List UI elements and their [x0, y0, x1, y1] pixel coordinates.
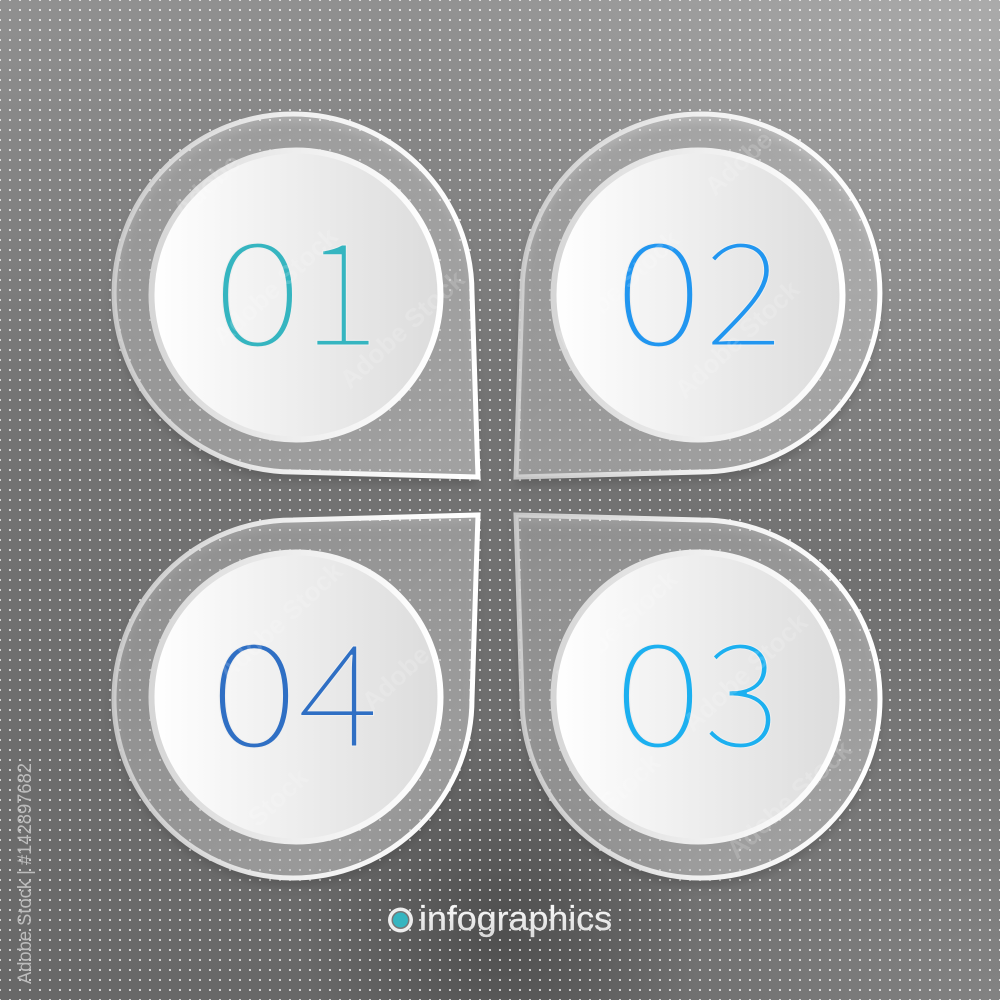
watermarks: Adobe Stock	[721, 734, 858, 864]
number 01: 1	[303, 180, 379, 386]
number 03: 0	[614, 581, 702, 787]
number 03	[614, 581, 779, 787]
number 02	[615, 180, 782, 386]
disc 03	[554, 552, 842, 842]
watermarks: Adobe	[167, 147, 246, 224]
panel: teardrop 02	[516, 114, 880, 485]
number 04: 4	[298, 581, 379, 787]
logo icon	[388, 908, 413, 932]
watermarks: Stock	[242, 762, 314, 832]
watermarks: Adobe Stock	[207, 221, 344, 351]
panel: teardrop 04	[114, 515, 478, 886]
disc 04	[152, 552, 440, 842]
number 03: 3	[704, 581, 779, 787]
number 04	[210, 581, 379, 787]
watermarks: Adobe	[699, 124, 778, 201]
watermarks: Adobe Stock	[212, 556, 349, 686]
logo text: infographics	[419, 900, 612, 938]
watermarks: Adobe Stock	[334, 264, 471, 394]
watermarks: Adobe Stock	[547, 564, 684, 694]
number 04: 0	[210, 581, 298, 787]
watermarks: Adobe Stock	[549, 224, 686, 354]
disc 01	[152, 150, 440, 440]
watermarks: Adobe Stock	[677, 607, 814, 737]
number 02: 0	[615, 180, 702, 386]
number 01: 0	[213, 180, 302, 386]
watermarks: Stock	[594, 747, 666, 817]
watermarks: Adobe Stock	[669, 274, 806, 404]
watermarks: Adobe	[356, 639, 435, 716]
disc 02	[554, 150, 842, 440]
panel: teardrop 03	[516, 515, 880, 886]
panel: teardrop 01	[114, 114, 478, 485]
number 01	[213, 180, 379, 386]
number 02: 2	[705, 180, 782, 386]
side stock label: Adobe Stock | #142897682	[14, 763, 36, 984]
watermarks	[167, 124, 858, 864]
